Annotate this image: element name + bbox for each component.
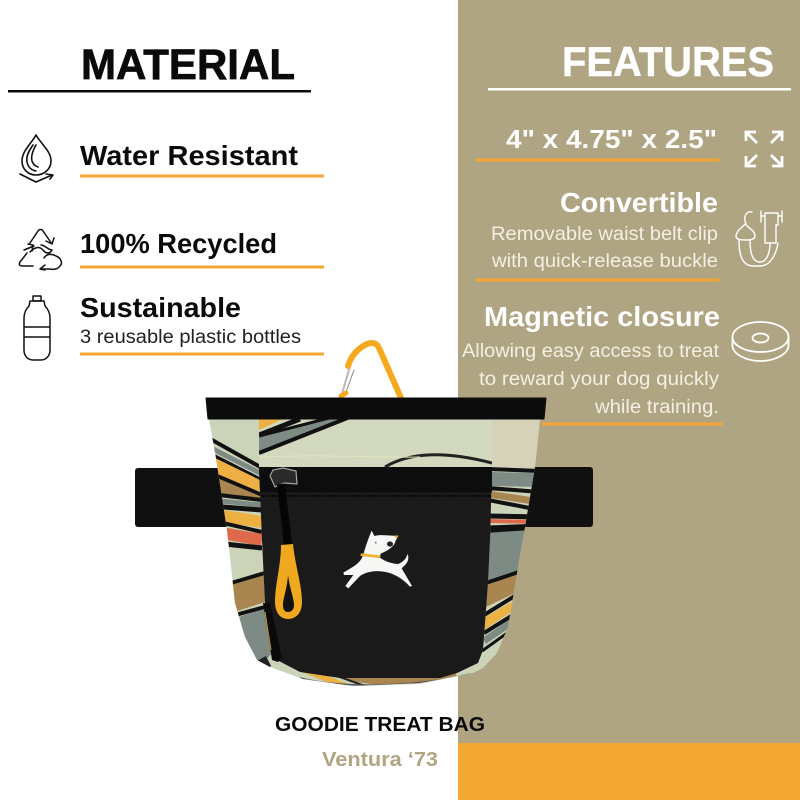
text: sustainable: 3 reusable plastic bottles (80, 327, 301, 348)
right side stripes (482, 419, 544, 651)
text: magnetic closure: Magnetic closure (484, 301, 720, 332)
panel: features background (458, 0, 800, 800)
icon: belt clip and buckle (736, 211, 782, 266)
icon: recycling wave (19, 230, 61, 270)
text: colourway: Ventura ‘73 (322, 749, 438, 771)
waist belt (135, 467, 593, 527)
zipper pull (263, 468, 302, 662)
product photo: treat bag (135, 343, 593, 686)
text: convertible (476, 187, 719, 282)
black mesh pocket (259, 467, 492, 678)
text: convertible: Removable waist belt clip (491, 224, 718, 245)
text: magnetic closure: Allowing easy access to treat (462, 341, 720, 362)
left side stripes (212, 438, 271, 667)
icon: expand arrows (746, 132, 782, 166)
bag body (209, 419, 540, 686)
text: 100% recycled (80, 228, 324, 268)
text: magnetic closure: to reward your dog quickly (479, 369, 720, 390)
text: convertible: Convertible (560, 187, 718, 218)
zipper band (259, 467, 492, 492)
text: magnetic closure (462, 301, 722, 426)
bottom stripes (300, 672, 470, 686)
text: sustainable (80, 292, 324, 356)
black top binding (206, 398, 546, 419)
dog logo (343, 531, 412, 588)
text: product name: GOODIE TREAT BAG (275, 714, 485, 736)
heading: material: MATERIAL (81, 42, 295, 89)
icon: bottle (24, 296, 50, 360)
text: convertible: with quick-release buckle (491, 251, 718, 272)
icon: water drop (20, 135, 53, 182)
heading: features: FEATURES (562, 38, 774, 85)
carabiner clip (341, 343, 401, 398)
orange footer bar (458, 743, 800, 800)
text: dimensions (476, 126, 719, 162)
text: dimensions: 4" x 4.75" x 2.5" (506, 126, 717, 154)
text: water resistant: Water Resistant (80, 140, 298, 171)
text: sustainable: Sustainable (80, 292, 241, 323)
top front panel (259, 417, 492, 469)
text: magnetic closure: while training. (594, 397, 719, 418)
icon: magnet disc (732, 322, 788, 361)
text: 100% recycled: 100% Recycled (80, 228, 277, 259)
